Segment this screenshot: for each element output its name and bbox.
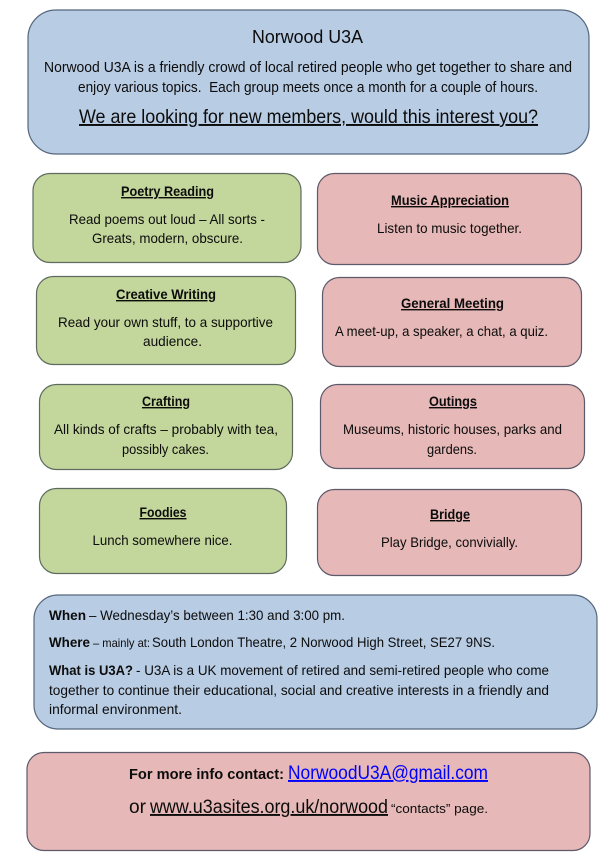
panel: Crafting: possibly cakes. [122, 441, 209, 457]
intro text: Norwood U3A is a friendly crowd of local retired people who get together to share and [44, 60, 572, 76]
where: – mainly at: [93, 636, 150, 650]
panel: General Meeting [322, 278, 582, 366]
where: South London Theatre, 2 Norwood High Street, SE27 9NS. [152, 634, 495, 650]
what is U3A [49, 662, 549, 717]
what is U3A: - U3A is a UK movement of retired and semi-retired people who come [136, 662, 549, 678]
panel: Creative Writing: audience. [143, 333, 202, 349]
title: Norwood U3A [252, 27, 363, 47]
panel: Foodies [40, 488, 286, 574]
where: Where [49, 634, 90, 650]
panel: Bridge [318, 490, 582, 576]
panel: Outings: Outings [429, 393, 477, 409]
panel: Poetry Reading: Poetry Reading [121, 183, 214, 199]
panel: Crafting: All kinds of crafts – probably with tea, [54, 421, 278, 437]
panel: Bridge: Play Bridge, convivially. [381, 534, 518, 550]
email line: NorwoodU3A@gmail.com [288, 763, 488, 784]
panel: Outings: gardens. [427, 441, 477, 457]
website line: www.u3asites.org.uk/norwood [149, 797, 388, 818]
panel: Music Appreciation: Music Appreciation [391, 192, 509, 208]
panel: Outings: Museums, historic houses, parks and [343, 421, 562, 437]
panel: Poetry Reading: Read poems out loud – All sorts - [69, 211, 265, 227]
website line: or [129, 797, 147, 818]
intro text [44, 60, 572, 96]
panel: General Meeting: General Meeting [401, 295, 504, 311]
panel: details when where what [34, 595, 597, 729]
panel: contact information [27, 752, 590, 850]
panel: Bridge: Bridge [430, 506, 470, 522]
panel: Crafting: Crafting [142, 393, 190, 409]
panel: Foodies: Lunch somewhere nice. [92, 532, 232, 548]
call to action heading: We are looking for new members, would this interest you? [79, 106, 538, 128]
email line [129, 763, 488, 784]
what is U3A: informal environment. [49, 701, 182, 717]
panel: header introduction [28, 10, 589, 154]
panel: Creative Writing: Creative Writing [116, 286, 216, 302]
panel: Crafting [40, 384, 292, 470]
email line: For more info contact: [129, 766, 284, 783]
panel: Foodies: Foodies [140, 504, 187, 520]
panel: Poetry Reading [33, 174, 301, 262]
panel: Music Appreciation [318, 174, 582, 264]
when: When [49, 607, 86, 623]
intro text: enjoy various topics. Each group meets once a month for a couple of hours. [78, 80, 538, 96]
panel: Creative Writing: Read your own stuff, to a supportive [58, 314, 273, 330]
panel: Creative Writing [36, 276, 296, 364]
panel: General Meeting: A meet-up, a speaker, a chat, a quiz. [335, 323, 548, 339]
what is U3A: together to continue their educational, social and creative interests in a friendly and [49, 682, 549, 698]
panel: Poetry Reading: Greats, modern, obscure. [92, 230, 243, 246]
website line: “contacts” page. [391, 801, 488, 816]
when: – Wednesday’s between 1:30 and 3:00 pm. [89, 607, 345, 623]
what is U3A: What is U3A? [49, 662, 133, 678]
panel: Music Appreciation: Listen to music together. [377, 220, 522, 236]
panel: Outings [320, 384, 584, 468]
